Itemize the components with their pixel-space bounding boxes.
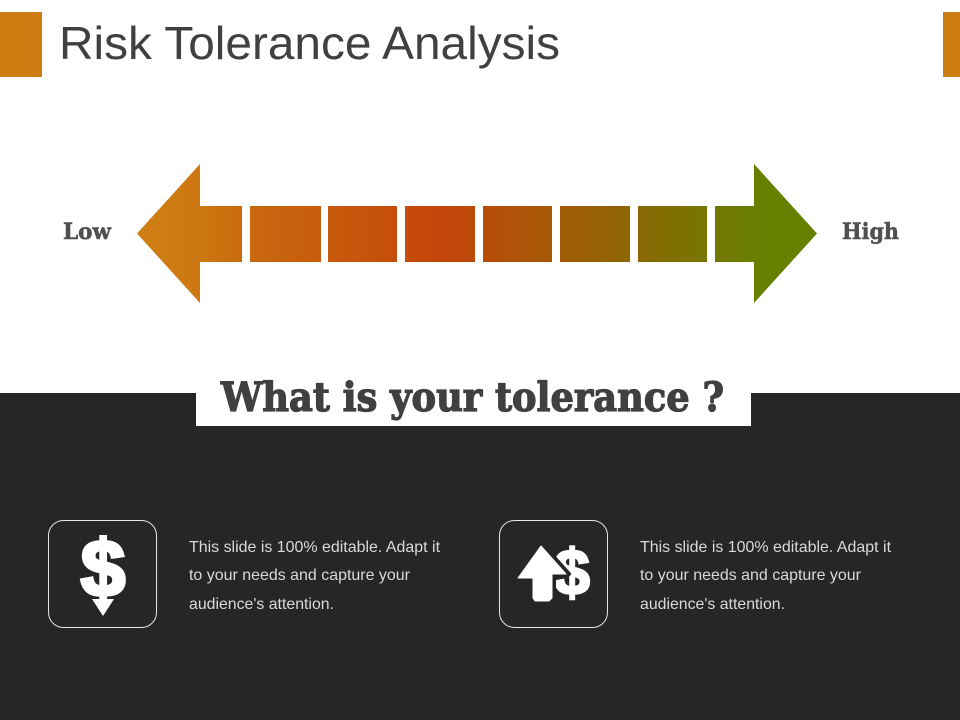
text block: right: to your needs and capture your	[640, 567, 862, 584]
text block: left: to your needs and capture your	[189, 567, 411, 584]
text block: left: This slide is 100% editable. Adapt it	[189, 539, 441, 556]
title: Risk Tolerance Analysis	[59, 17, 560, 69]
label: low: Low	[63, 219, 112, 245]
icon: dollar with down arrow: $	[81, 524, 125, 613]
icon: dollar with down arrow	[48, 520, 156, 628]
right accent block	[943, 12, 960, 77]
icon: up arrow with dollar	[500, 520, 608, 628]
icon: up arrow with dollar: $	[554, 536, 590, 608]
left accent block	[0, 12, 42, 77]
text block: right	[640, 539, 892, 613]
text block: left: audience's attention.	[189, 596, 334, 613]
text block: right: audience's attention.	[640, 596, 785, 613]
gradient double-headed arrow scale	[137, 164, 817, 303]
label: high: High	[842, 219, 899, 245]
dark lower panel	[0, 393, 960, 720]
text block: right: This slide is 100% editable. Adapt it	[640, 539, 892, 556]
heading box: What is your tolerance ?	[220, 374, 724, 421]
text block: left	[189, 539, 441, 613]
